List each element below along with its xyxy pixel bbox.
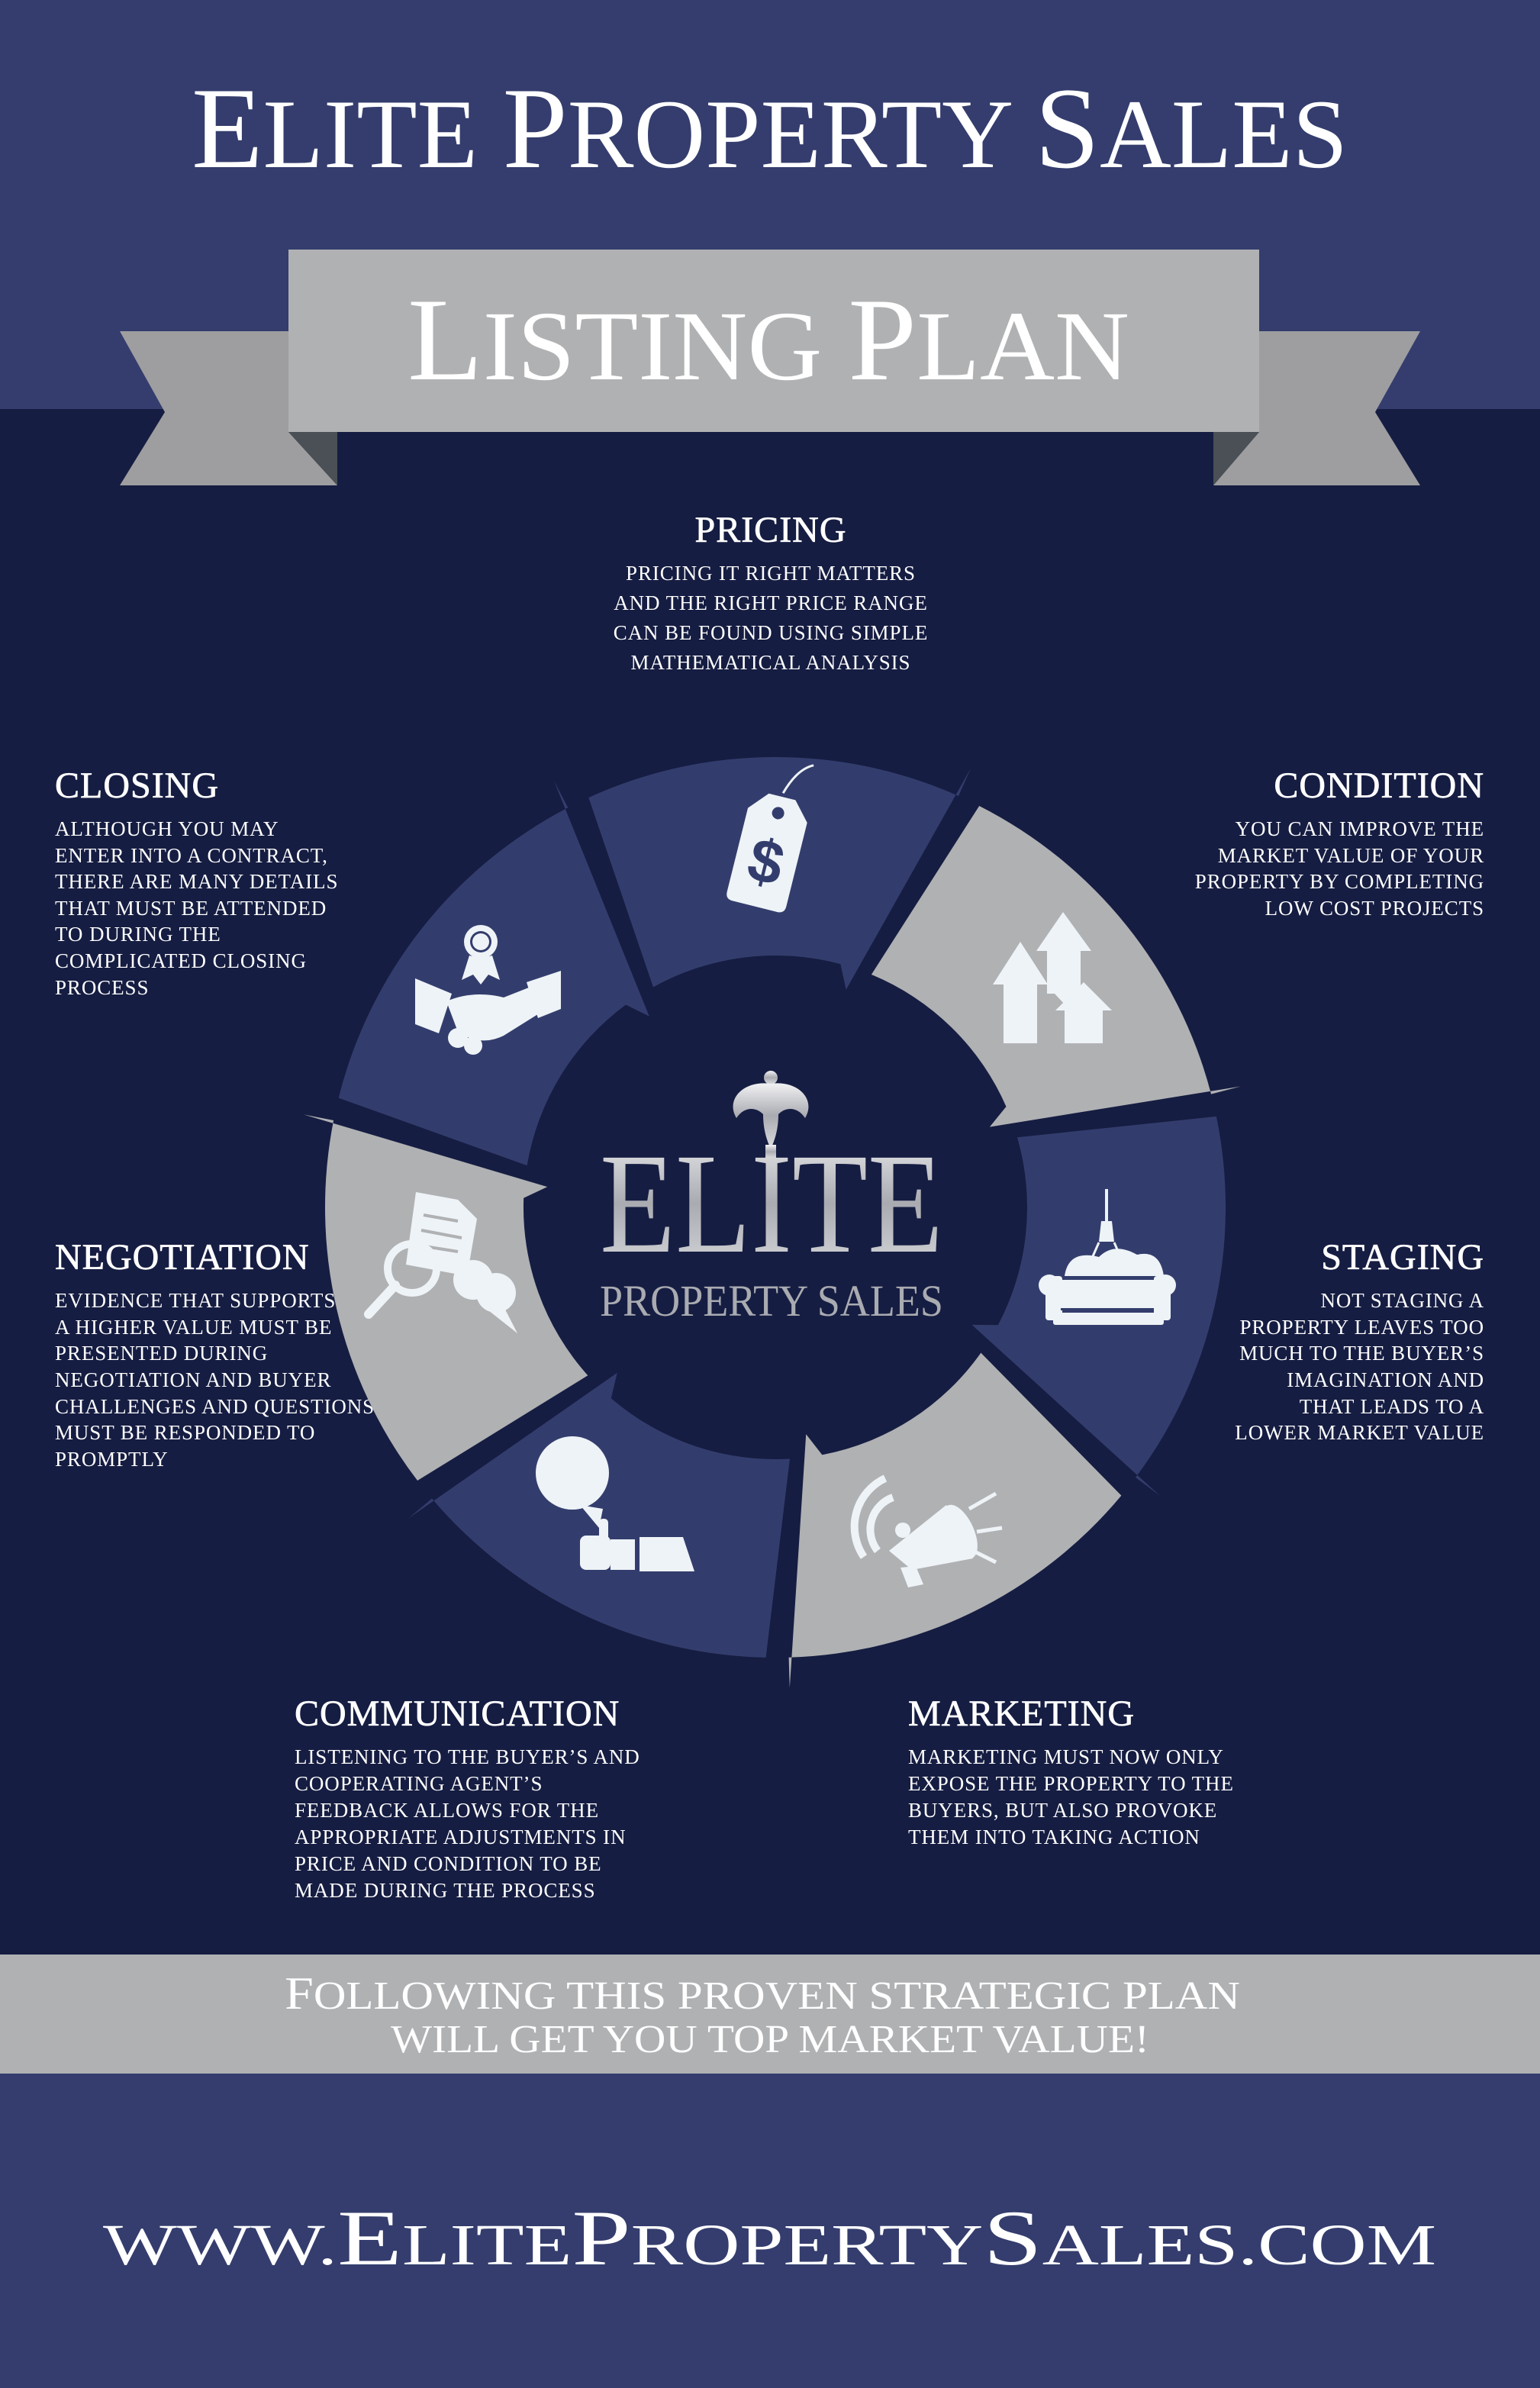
section: negotiation: MUST BE RESPONDED TO — [55, 1421, 315, 1444]
section: closing: THAT MUST BE ATTENDED — [55, 897, 327, 920]
section: condition: PROPERTY BY COMPLETING — [1195, 870, 1484, 893]
banner: call to action: FOLLOWING THIS PROVEN STRATEGIC PLAN — [285, 1968, 1240, 2019]
section: closing: THERE ARE MANY DETAILS — [55, 870, 338, 893]
section: pricing: CAN BE FOUND USING SIMPLE — [614, 621, 928, 644]
section: staging — [1235, 1237, 1484, 1444]
wheel chart — [293, 757, 1256, 1698]
banner: call to action — [0, 1955, 1540, 2074]
banner: call to action: WILL GET YOU TOP MARKET VALUE! — [391, 2018, 1149, 2061]
ribbon: listing plan — [120, 250, 1420, 485]
section: communication: LISTENING TO THE BUYER’S AND — [295, 1745, 640, 1768]
ribbon: listing plan: LISTING PLAN — [408, 274, 1129, 405]
section: condition: MARKET VALUE OF YOUR — [1218, 844, 1484, 867]
icon: price tag — [725, 752, 821, 914]
icon: megaphone — [855, 1478, 1002, 1587]
section: marketing: MARKETING MUST NOW ONLY — [908, 1745, 1224, 1768]
center logo: PROPERTY SALES — [600, 1276, 943, 1326]
center logo — [600, 1071, 943, 1326]
section: negotiation: NEGOTIATION AND BUYER — [55, 1368, 331, 1391]
section: marketing: MARKETING — [908, 1694, 1135, 1734]
section: pricing: MATHEMATICAL ANALYSIS — [631, 651, 910, 674]
title: ELITE PROPERTY SALES — [192, 64, 1348, 192]
section: closing — [55, 765, 338, 999]
section: communication: PRICE AND CONDITION TO BE — [295, 1852, 602, 1875]
segment: staging — [944, 1074, 1256, 1498]
segment: pricing — [588, 757, 971, 990]
section: negotiation: EVIDENCE THAT SUPPORTS — [55, 1289, 336, 1312]
section: negotiation: PRESENTED DURING — [55, 1342, 268, 1365]
icon: speech bubble and thumbs up — [536, 1436, 694, 1571]
section: communication: APPROPRIATE ADJUSTMENTS IN — [295, 1826, 626, 1848]
center logo: ELITE — [600, 1123, 943, 1283]
section: communication — [295, 1694, 640, 1902]
section: closing: COMPLICATED CLOSING — [55, 949, 307, 972]
section: closing: ALTHOUGH YOU MAY — [55, 817, 279, 840]
section: closing: TO DURING THE — [55, 923, 221, 946]
section: staging: MUCH TO THE BUYER’S — [1239, 1342, 1484, 1365]
section: staging: PROPERTY LEAVES TOO — [1239, 1316, 1484, 1339]
section: negotiation — [55, 1237, 375, 1471]
section: condition — [1195, 765, 1484, 920]
section: communication: COOPERATING AGENT’S — [295, 1772, 543, 1795]
segment: closing — [307, 774, 727, 1217]
section: condition: LOW COST PROJECTS — [1265, 897, 1484, 920]
section: staging: THAT LEADS TO A — [1300, 1395, 1484, 1418]
icon: houses with arrows — [993, 912, 1112, 1043]
bottom band — [0, 2074, 1540, 2388]
section: staging: LOWER MARKET VALUE — [1235, 1421, 1484, 1444]
segment: marketing — [694, 1323, 1139, 1698]
section: pricing: AND THE RIGHT PRICE RANGE — [614, 591, 928, 614]
section: pricing: PRICING IT RIGHT MATTERS — [626, 562, 916, 585]
section: communication: COMMUNICATION — [295, 1694, 620, 1734]
section: condition: CONDITION — [1274, 765, 1484, 806]
segment: condition — [829, 781, 1249, 1224]
section: negotiation: NEGOTIATION — [55, 1237, 310, 1278]
section: staging: NOT STAGING A — [1320, 1289, 1484, 1312]
section: pricing: PRICING — [694, 510, 847, 550]
section: closing: CLOSING — [55, 765, 219, 806]
section: marketing: THEM INTO TAKING ACTION — [908, 1826, 1200, 1848]
wheel icons — [369, 752, 1176, 1587]
section: closing: PROCESS — [55, 976, 149, 999]
section: negotiation: CHALLENGES AND QUESTIONS — [55, 1395, 375, 1418]
section: staging: IMAGINATION AND — [1287, 1368, 1484, 1391]
icon: price tag: $ — [741, 824, 791, 899]
segment: negotiation — [293, 1065, 604, 1490]
section: negotiation: A HIGHER VALUE MUST BE — [55, 1316, 332, 1339]
key ornament — [733, 1071, 808, 1159]
section: communication: MADE DURING THE PROCESS — [295, 1879, 595, 1902]
section: closing: ENTER INTO A CONTRACT, — [55, 844, 328, 867]
section: marketing — [908, 1694, 1234, 1848]
website url: WWW. E LITE P ROPERTY S ALES.COM — [103, 2195, 1436, 2282]
icon: handshake with medal — [415, 925, 561, 1055]
section: staging: STAGING — [1321, 1237, 1484, 1278]
section: negotiation: PROMPTLY — [55, 1448, 169, 1471]
section: marketing: EXPOSE THE PROPERTY TO THE — [908, 1772, 1234, 1795]
section: condition: YOU CAN IMPROVE THE — [1236, 817, 1484, 840]
section: pricing — [614, 510, 928, 674]
section: marketing: BUYERS, BUT ALSO PROVOKE — [908, 1799, 1217, 1822]
segment: communication — [404, 1319, 849, 1694]
icon: sofa and lamp — [1039, 1189, 1176, 1325]
background: top band — [0, 0, 1540, 409]
section: communication: FEEDBACK ALLOWS FOR THE — [295, 1799, 599, 1822]
icon: document with magnifier and chat — [369, 1192, 517, 1333]
